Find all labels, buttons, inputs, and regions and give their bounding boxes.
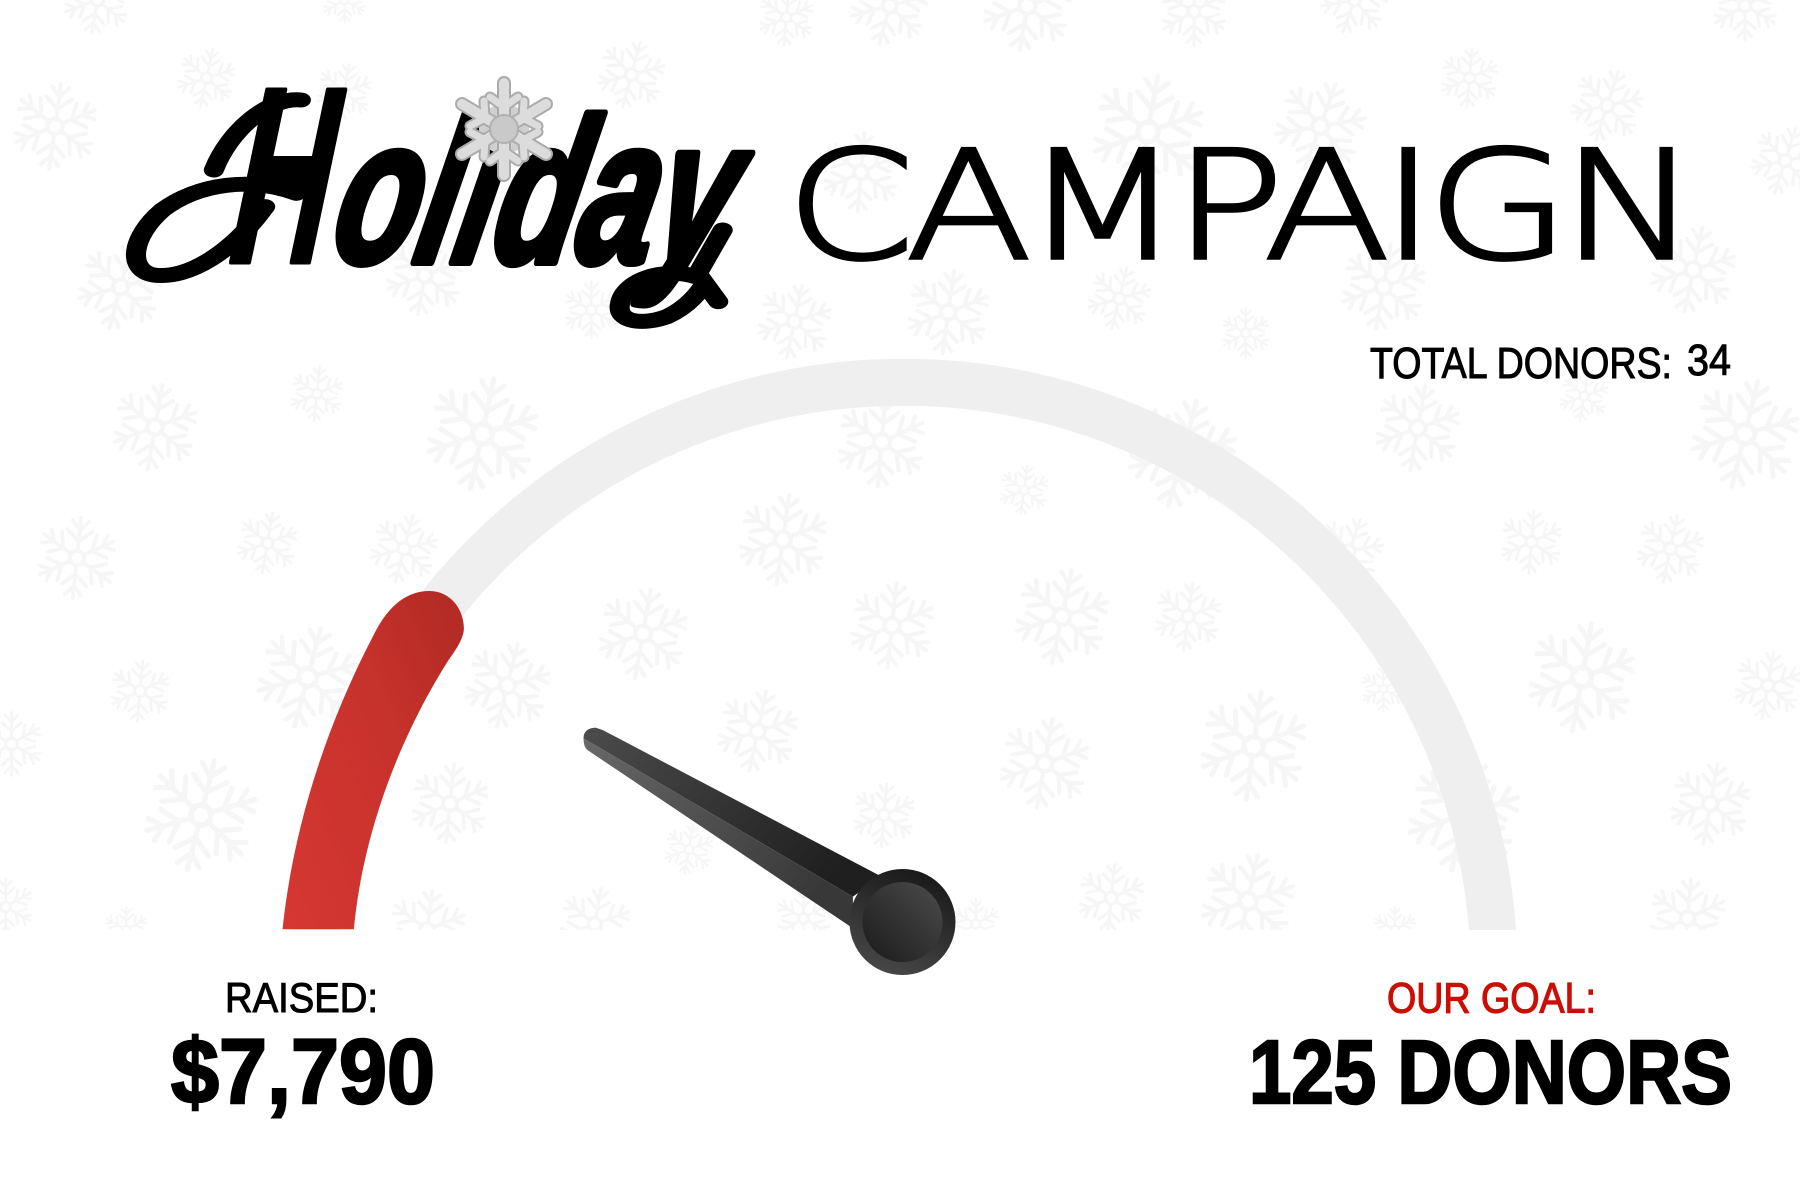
total donors value: 34 <box>1687 337 1731 385</box>
raised amount: $7,790 <box>171 1021 435 1123</box>
title word: oliday of Holiday: oliday <box>318 77 769 306</box>
total donors label: TOTAL DONORS: <box>1370 340 1672 388</box>
needle upper facet <box>584 728 882 897</box>
gauge progress arc <box>283 591 464 929</box>
needle hub <box>850 869 956 975</box>
goal label: OUR GOAL: <box>1387 974 1596 1022</box>
title word: H of Holiday: H <box>222 35 352 315</box>
raised block <box>171 974 435 1123</box>
title <box>136 35 1690 321</box>
gauge track <box>312 382 1494 973</box>
total donors counter <box>1370 337 1731 388</box>
title word: CAMPAIGN: CAMPAIGN <box>786 120 1690 294</box>
gauge needle <box>584 728 956 975</box>
title flourishes <box>136 100 723 321</box>
raised label: RAISED: <box>225 974 378 1021</box>
icon: silver glitter snowflake <box>462 83 546 175</box>
needle lower facet <box>584 738 853 928</box>
goal block <box>1249 974 1732 1123</box>
